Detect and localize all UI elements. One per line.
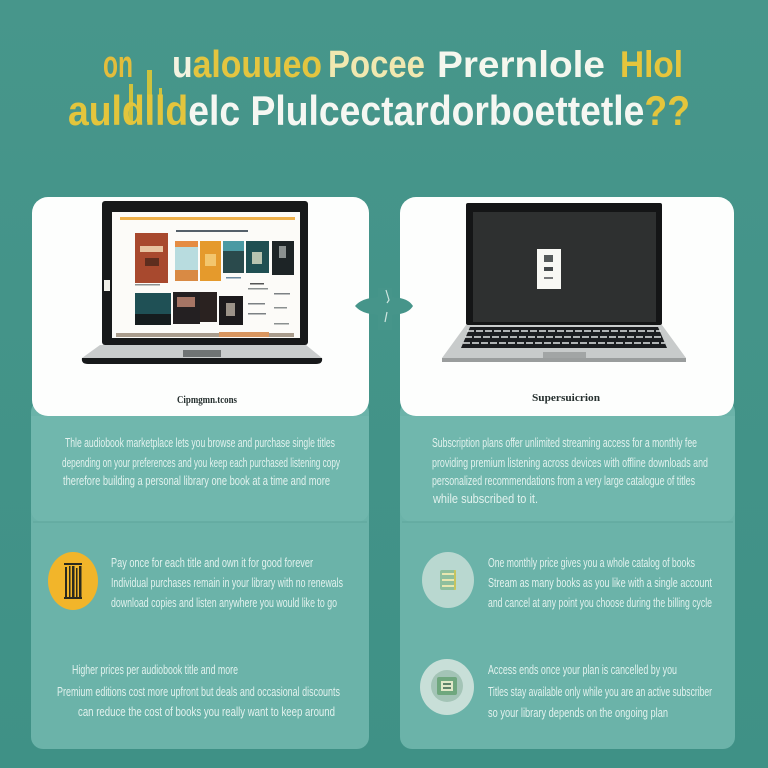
title: on — [103, 44, 133, 86]
laptop screen storefront — [112, 212, 300, 338]
text block: left intro: Thle audiobook marketplace lets you browse and purchase single titles — [65, 435, 335, 450]
text block: right feature two — [488, 662, 712, 720]
text block: left intro: therefore building a personal library one book at a time and more — [63, 473, 330, 488]
icon: right laptop with dark screen — [442, 203, 686, 362]
small white app panel on screen — [537, 249, 561, 289]
title: Pocee — [328, 44, 425, 86]
text block: right intro: while subscribed to it. — [432, 491, 538, 506]
text block: left feature two: Premium editions cost more upfront but deals and occasional discounts — [57, 684, 340, 699]
icon: left laptop with storefront — [82, 201, 322, 364]
panel: left card — [32, 197, 369, 416]
text block: left feature one: download copies and listen anywhere you would like to go — [111, 595, 337, 610]
text block: right feature one — [488, 555, 712, 610]
text block: right intro — [432, 435, 708, 506]
panel: right card — [400, 197, 734, 416]
icon: yellow barcode badge — [48, 552, 98, 610]
title: ualouueo — [172, 44, 322, 86]
title: Hlol — [620, 44, 683, 85]
icon: pale badge one — [422, 552, 474, 608]
icon: connector between cards — [355, 288, 413, 330]
caption: right laptop: Supersuicrion — [532, 392, 600, 404]
text block: left feature one — [111, 555, 343, 610]
caption: left laptop: Cipmgmn.tcons — [177, 394, 238, 406]
text block: right feature two: Access ends once your plan is cancelled by you — [488, 662, 677, 677]
right intro band — [400, 416, 735, 522]
icon: title bar chart accent — [129, 70, 162, 122]
text block: left feature two: Higher prices per audiobook title and more — [72, 662, 238, 677]
left intro band — [31, 416, 369, 522]
text block: right feature two: so your library depends on the ongoing plan — [488, 705, 668, 720]
title: auldlldelc Plulcectardorboettetle?? — [68, 87, 690, 134]
text block: left intro — [62, 435, 340, 488]
panel: right details — [400, 400, 735, 749]
text block: left feature two: can reduce the cost of books you really want to keep around — [78, 704, 335, 719]
laptop webcam glint — [104, 280, 110, 291]
text block: left feature one: Individual purchases remain in your library with no renewals — [111, 575, 343, 590]
panel: left details — [31, 400, 369, 749]
icon: pale badge two — [420, 659, 474, 715]
title — [68, 44, 690, 134]
text block: left feature one: Pay once for each title and own it for good forever — [111, 555, 313, 570]
text block: left intro: depending on your preferences and you keep each purchased listening copy — [62, 455, 340, 470]
title: Prernlole — [437, 44, 605, 85]
text block: left feature two — [57, 662, 340, 719]
